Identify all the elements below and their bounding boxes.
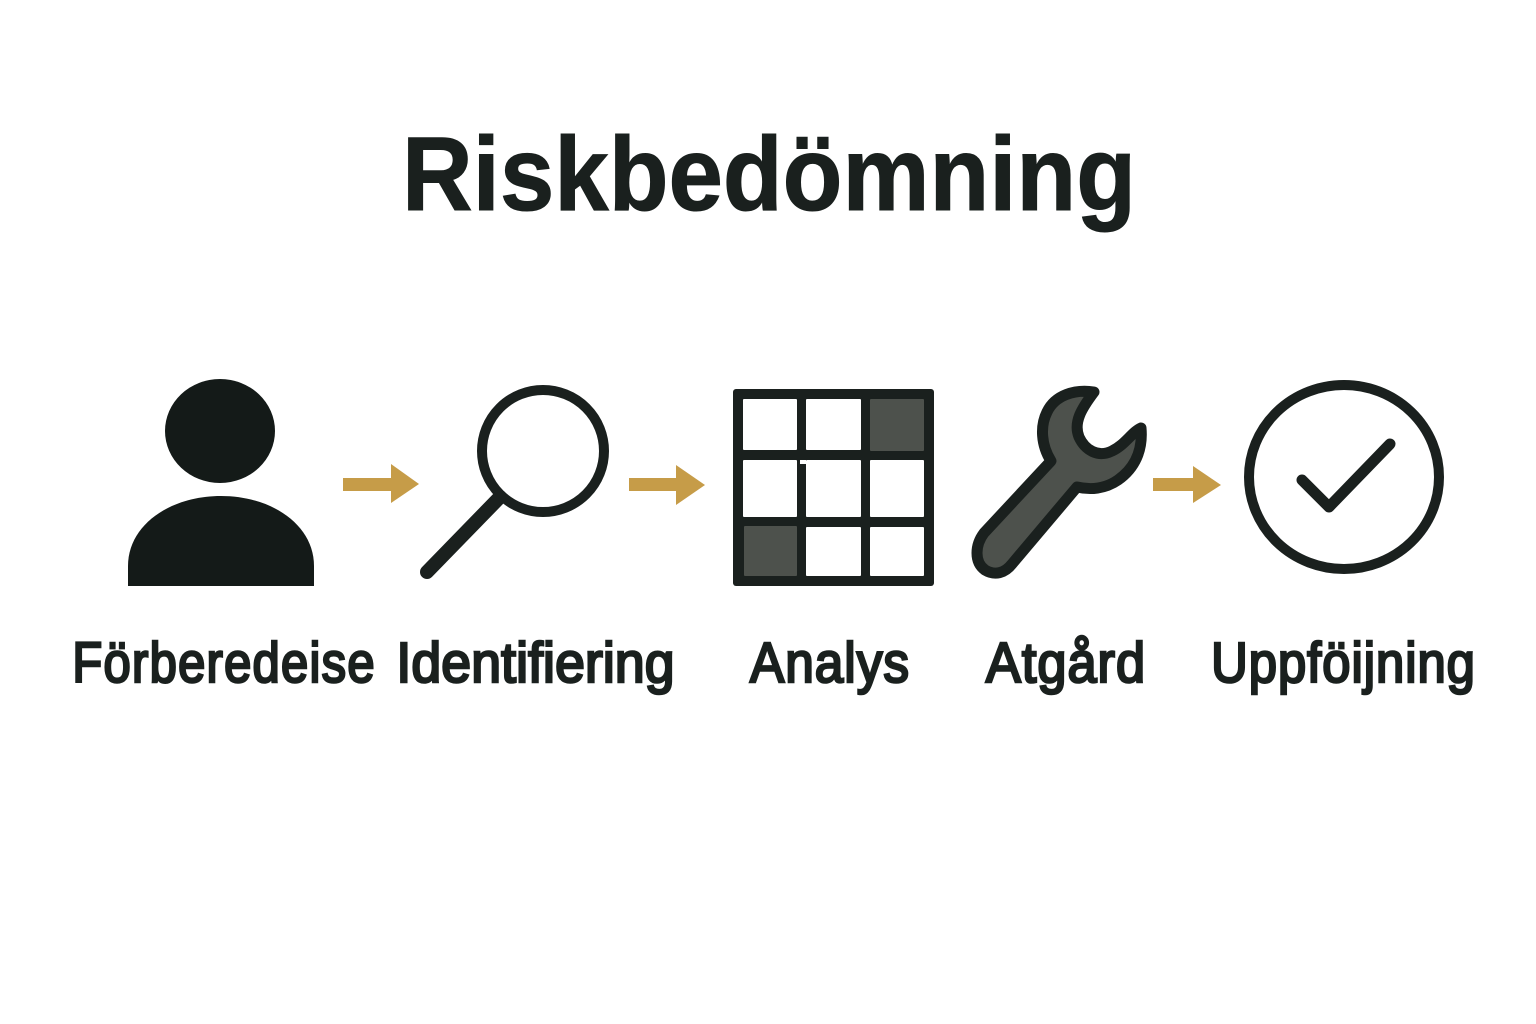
label: Förberedeise: Förberedeise <box>72 632 375 695</box>
icon: magnifying glass <box>427 390 604 572</box>
label: Uppföijning: Uppföijning <box>1211 633 1475 695</box>
arrow: step 1 to 2 <box>343 464 419 503</box>
icon: wrench <box>977 391 1141 573</box>
label: Identifiering: Identifiering <box>396 631 675 694</box>
arrow: step 4 to 5 <box>1153 466 1221 503</box>
title: Riskbedömning <box>402 116 1136 233</box>
arrow: step 2 to 3 <box>629 465 705 505</box>
label: Atgård: Atgård <box>986 632 1145 694</box>
icon: person <box>128 379 314 586</box>
label: Analys: Analys <box>750 632 909 695</box>
icon: risk matrix <box>733 389 934 586</box>
icon: check circle <box>1249 385 1439 569</box>
